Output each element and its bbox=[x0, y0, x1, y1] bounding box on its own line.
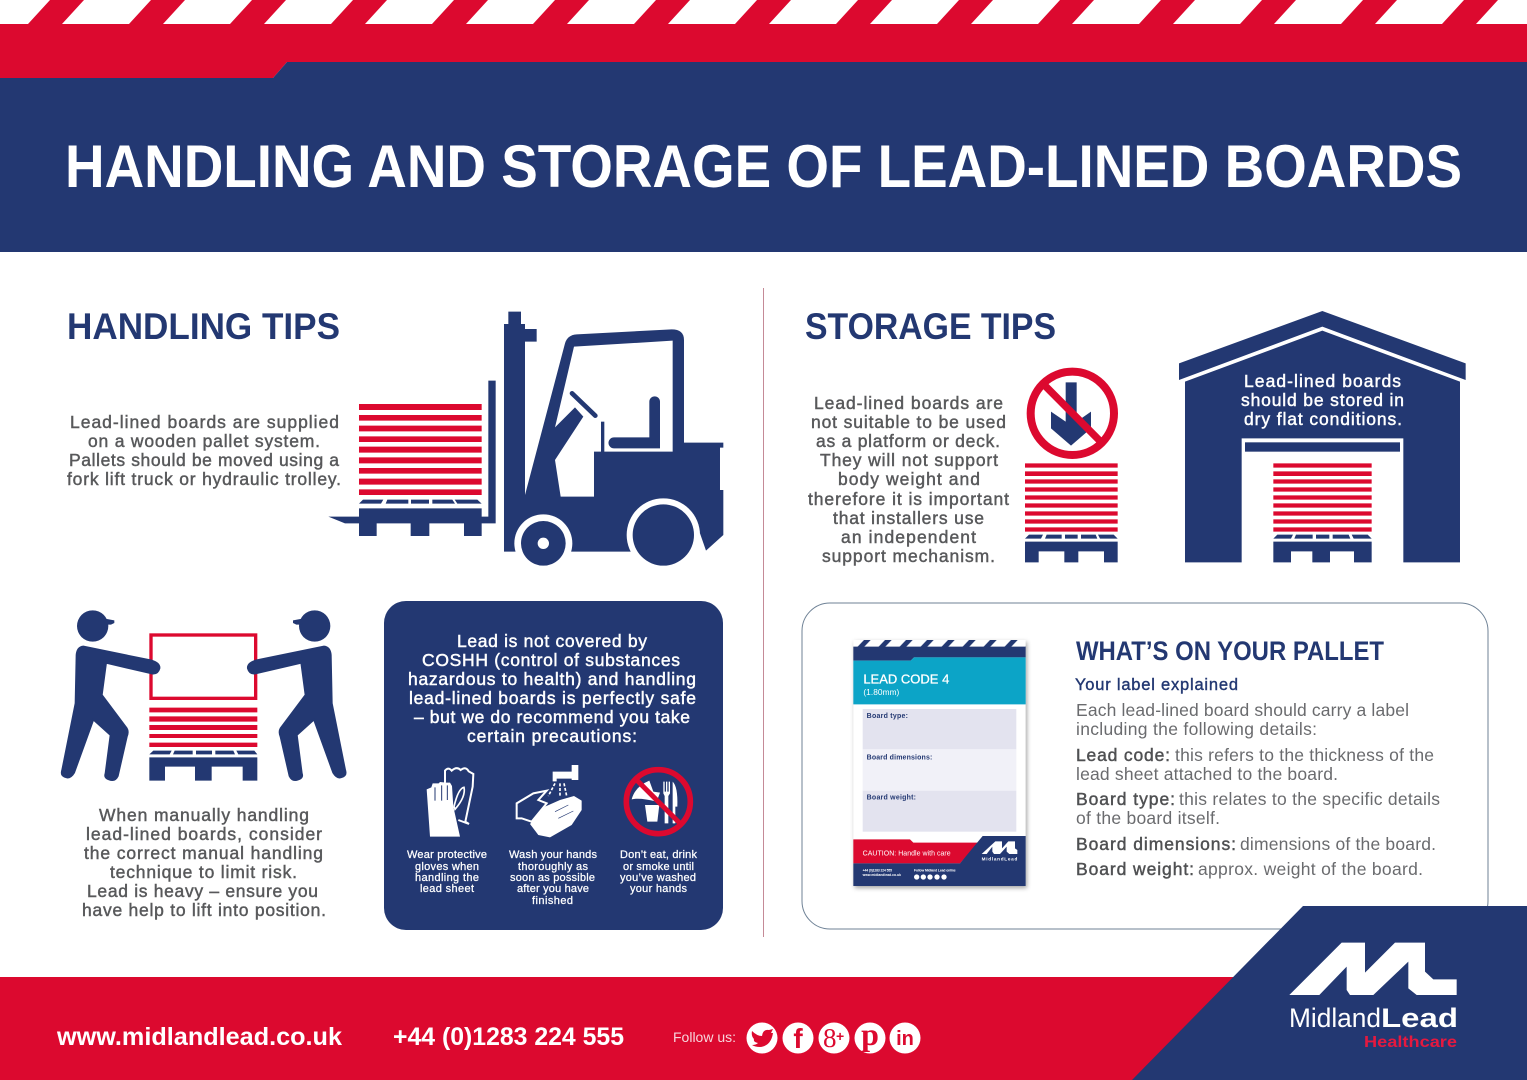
caption: wash hands: after you have bbox=[517, 883, 589, 895]
text: not a platform: as a platform or deck. bbox=[816, 431, 1000, 451]
panel intro text: hazardous to health) and handling bbox=[408, 669, 696, 689]
logo wordmark: Midland: Midland bbox=[1289, 1003, 1381, 1033]
text: not a platform: not suitable to be used bbox=[811, 412, 1006, 432]
icon: no eating or drinking bbox=[626, 770, 690, 834]
social icons: + bbox=[836, 1028, 844, 1044]
logo: Midland Lead Healthcare bbox=[1289, 943, 1458, 1051]
website: www.midlandlead.co.uk bbox=[56, 1023, 342, 1051]
caption: wash hands: thoroughly as bbox=[518, 861, 588, 873]
footer band bbox=[0, 977, 1527, 1080]
label sample card: LEAD CODE 4 bbox=[863, 672, 949, 686]
icon: warehouse with pallet bbox=[1179, 311, 1466, 562]
text: not a platform: body weight and bbox=[838, 469, 980, 489]
text: label explanation: this relates to the specific details bbox=[1179, 789, 1440, 809]
text: label explanation bbox=[1076, 700, 1440, 879]
text: label explanation: this refers to the thickness of the bbox=[1175, 745, 1434, 765]
text: label explanation: Each lead-lined board should carry a label bbox=[1076, 700, 1409, 720]
label sample card: Board dimensions: bbox=[867, 754, 932, 761]
text: label explanation: Board dimensions: bbox=[1076, 834, 1236, 854]
caption: do not eat: Don’t eat, drink bbox=[620, 849, 698, 861]
icon: gloves bbox=[427, 768, 473, 837]
label sample card: CAUTION: Handle with care bbox=[863, 850, 951, 857]
social icons bbox=[746, 1016, 920, 1054]
text: manual handling: have help to lift into position. bbox=[82, 900, 326, 920]
logo wordmark: Lead: Lead bbox=[1381, 1003, 1458, 1033]
label sample card: (1.80mm) bbox=[863, 687, 900, 697]
text: label explanation: Lead code: bbox=[1076, 745, 1170, 765]
caption: gloves: gloves when bbox=[415, 861, 479, 873]
text: not a platform: support mechanism. bbox=[822, 546, 995, 566]
label sample card: Board type: bbox=[867, 713, 908, 720]
text: label explanation: lead sheet attached to the board. bbox=[1076, 764, 1338, 784]
icon: two workers lifting a board bbox=[62, 610, 345, 781]
text: not a platform: Lead-lined boards are bbox=[814, 393, 1003, 413]
heading: storage tips: STORAGE TIPS bbox=[805, 306, 1056, 347]
text: label explanation: Board weight: bbox=[1076, 859, 1194, 879]
caption: wash hands: Wash your hands bbox=[509, 849, 598, 861]
text: pallet system: Lead-lined boards are supplied bbox=[70, 412, 339, 432]
caption: gloves: Wear protective bbox=[407, 849, 487, 861]
social icons: 8 bbox=[823, 1023, 836, 1053]
panel: COSHH precautions bbox=[384, 601, 723, 930]
caption: do not eat bbox=[620, 849, 698, 895]
text: pallet system: on a wooden pallet system. bbox=[88, 431, 320, 451]
panel intro text: COSHH (control of substances bbox=[422, 650, 680, 670]
icon: no standing sign above pallet bbox=[1025, 372, 1118, 562]
text: label explanation: approx. weight of the board. bbox=[1198, 859, 1423, 879]
title banner bbox=[0, 62, 1527, 252]
text: not a platform: that installers use bbox=[833, 508, 984, 528]
text: label explanation: Board type: bbox=[1076, 789, 1175, 809]
text: manual handling bbox=[82, 805, 326, 920]
text: dry flat conditions bbox=[1241, 371, 1404, 429]
caption: do not eat: your hands bbox=[630, 883, 688, 895]
text: dry flat conditions: should be stored in bbox=[1241, 390, 1404, 410]
text: manual handling: the correct manual handling bbox=[84, 843, 323, 863]
caption: gloves: handling the bbox=[415, 872, 479, 884]
logo subtitle: Healthcare bbox=[1364, 1034, 1457, 1051]
caption: wash hands bbox=[509, 849, 598, 907]
footer logo panel bbox=[1132, 906, 1527, 1080]
text: not a platform: an independent bbox=[841, 527, 976, 547]
label sample card bbox=[853, 640, 1027, 888]
text: manual handling: lead-lined boards, consider bbox=[86, 824, 322, 844]
icon: forklift with pallet bbox=[328, 312, 723, 572]
caption: wash hands: soon as possible bbox=[510, 872, 595, 884]
panel intro text: lead-lined boards is perfectly safe bbox=[409, 688, 696, 708]
text: pallet system bbox=[67, 412, 341, 489]
label sample card: www.midlandlead.co.uk bbox=[862, 873, 901, 877]
panel intro text: – but we do recommend you take bbox=[414, 707, 690, 727]
label sample card: MidlandLead bbox=[982, 857, 1017, 862]
text: label explanation: of the board itself. bbox=[1076, 808, 1220, 828]
text: manual handling: When manually handling bbox=[99, 805, 309, 825]
text: not a platform bbox=[808, 393, 1009, 566]
text: label explanation: dimensions of the board. bbox=[1240, 834, 1436, 854]
panel intro text bbox=[408, 631, 696, 746]
text: label explanation: including the following details: bbox=[1076, 719, 1317, 739]
subheading: your label explained: Your label explained bbox=[1075, 676, 1238, 694]
caption: gloves: lead sheet bbox=[420, 883, 474, 895]
follow us label: Follow us: bbox=[673, 1029, 736, 1045]
heading: handling tips: HANDLING TIPS bbox=[67, 306, 340, 347]
centre divider bbox=[763, 288, 764, 937]
panel intro text: Lead is not covered by bbox=[457, 631, 647, 651]
text: not a platform: therefore it is important bbox=[808, 489, 1009, 509]
social icons: in bbox=[896, 1028, 914, 1050]
social icons: f bbox=[793, 1023, 803, 1054]
caption: gloves bbox=[407, 849, 487, 895]
label sample card: +44 (0)1283 224 555 bbox=[863, 869, 892, 873]
text: manual handling: technique to limit risk. bbox=[110, 862, 297, 882]
logo mark bbox=[1289, 943, 1457, 995]
text: dry flat conditions: dry flat conditions. bbox=[1244, 409, 1402, 429]
label sample card: Board weight: bbox=[867, 794, 916, 801]
label sample card: Follow Midland Lead online bbox=[914, 869, 956, 873]
social icons: p bbox=[861, 1016, 879, 1052]
caption: do not eat: or smoke until bbox=[623, 861, 694, 873]
caption: do not eat: you’ve washed bbox=[620, 872, 696, 884]
text: not a platform: They will not support bbox=[820, 450, 998, 470]
panel: what's on your pallet bbox=[802, 603, 1488, 929]
text: pallet system: fork lift truck or hydraulic trolley. bbox=[67, 469, 341, 489]
caption: wash hands: finished bbox=[532, 895, 573, 907]
icon: washing hands bbox=[517, 765, 582, 837]
text: pallet system: Pallets should be moved using a bbox=[69, 450, 339, 470]
header hazard stripe band bbox=[0, 0, 1527, 78]
text: dry flat conditions: Lead-lined boards bbox=[1244, 371, 1401, 391]
text: manual handling: Lead is heavy – ensure you bbox=[87, 881, 318, 901]
heading: what's on your pallet: WHAT’S ON YOUR PALLET bbox=[1076, 636, 1384, 666]
phone number: +44 (0)1283 224 555 bbox=[393, 1023, 624, 1051]
panel intro text: certain precautions: bbox=[467, 726, 637, 746]
